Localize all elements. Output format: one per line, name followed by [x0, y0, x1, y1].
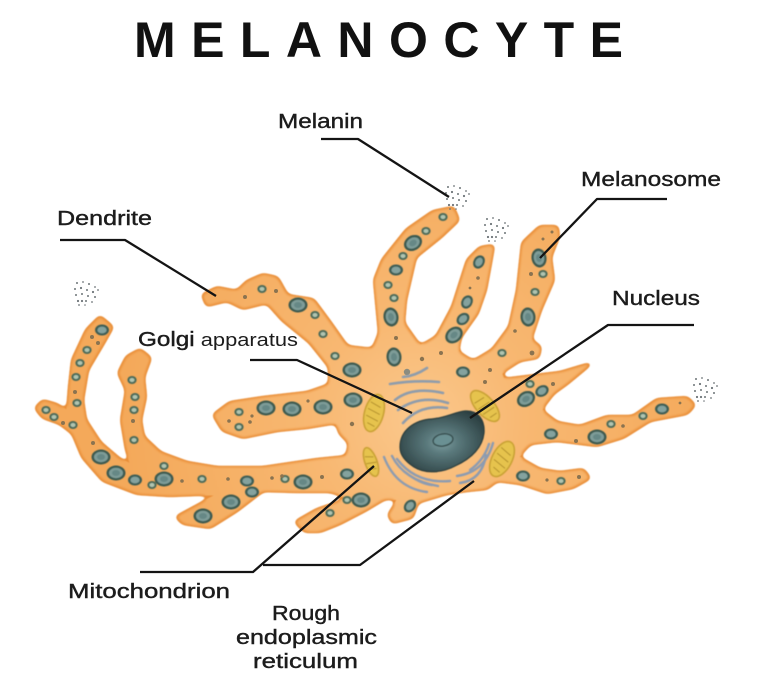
label: Golgi apparatus: Golgi apparatus — [138, 329, 298, 351]
label: Melanin: Melanin — [278, 111, 363, 133]
mitochondria — [360, 386, 520, 480]
label: Nucleus: Nucleus — [612, 288, 700, 310]
label: Rough endoplasmic reticulum: reticulum — [253, 651, 358, 673]
label: Golgi apparatus — [138, 329, 412, 413]
nucleus — [400, 411, 484, 472]
label: Melanosome: Melanosome — [581, 169, 721, 191]
mitochondrion lower right — [484, 438, 520, 480]
rough endoplasmic reticulum — [384, 443, 493, 492]
label: Dendrite — [57, 208, 216, 296]
nucleolus — [432, 432, 454, 448]
label: Rough endoplasmic reticulum: Rough — [272, 603, 340, 625]
label: Rough endoplasmic reticulum: endoplasmic — [236, 627, 377, 649]
label: Rough endoplasmic reticulum — [236, 481, 474, 673]
mitochondrion upper left — [360, 392, 388, 434]
label: Mitochondrion: Mitochondrion — [68, 581, 230, 603]
label: Melanin — [278, 111, 449, 197]
mitochondrion lower left — [360, 446, 382, 478]
cell body and dendrites — [36, 208, 694, 531]
mitochondrion upper right — [466, 386, 504, 426]
small vesicles — [61, 230, 681, 483]
label: Dendrite: Dendrite — [57, 208, 152, 230]
melanocyte cell — [36, 208, 694, 531]
melanin granules — [74, 185, 718, 402]
Golgi apparatus — [390, 368, 448, 423]
title: MELANOCYTE — [134, 12, 623, 68]
label: Mitochondrion — [68, 466, 374, 603]
label: Melanosome — [540, 169, 721, 258]
melanosomes — [41, 213, 669, 524]
label: Nucleus — [470, 288, 700, 418]
